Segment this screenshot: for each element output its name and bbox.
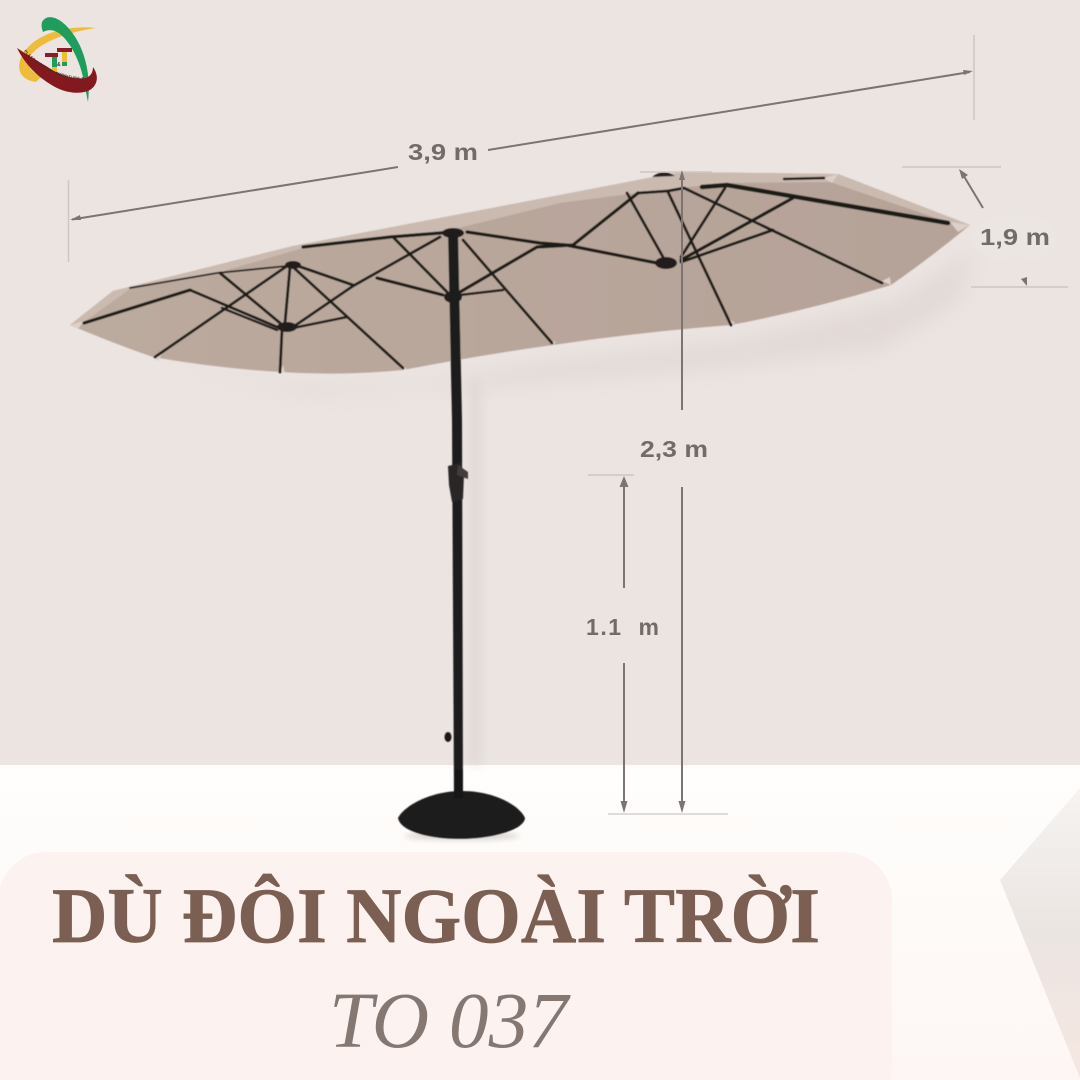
background wall <box>0 0 1080 766</box>
title panel <box>0 852 892 1080</box>
dimension: 1.1 m: 1.1 m <box>586 614 659 640</box>
rib tips <box>70 174 970 373</box>
green arc <box>42 17 89 102</box>
logo <box>17 17 97 102</box>
model code: TO 037 <box>329 978 572 1065</box>
pole <box>448 232 463 800</box>
pole shadow on wall <box>468 380 482 765</box>
logo curved text: PLASTIC RATTAN FURNITURE T <box>24 50 84 80</box>
title: DÙ ĐÔI NGOÀI TRỜI <box>52 872 820 959</box>
upper canopy fold <box>70 172 970 325</box>
dimension: 2,3 m <box>640 170 712 813</box>
hubs <box>277 228 677 332</box>
decorative chevron <box>1000 788 1080 1078</box>
baseline tick <box>608 813 728 815</box>
logo mark: & <box>57 62 61 68</box>
right ribs <box>627 178 948 325</box>
yellow arc <box>19 27 96 82</box>
dimension: 1.1 m <box>586 475 659 813</box>
umbrella shadow on wall <box>160 250 975 395</box>
dimension: 1,9 m: 1,9 m <box>980 224 1050 250</box>
maroon swoosh <box>17 48 97 93</box>
floor <box>0 765 1080 1080</box>
left ribs <box>84 237 440 372</box>
base shadow <box>404 832 520 840</box>
dimension: 1,9 m <box>902 167 1068 287</box>
tilt knob <box>444 732 452 742</box>
pole foot <box>454 770 463 798</box>
umbrella frame ribs <box>84 178 948 372</box>
dimension: 3,9 m <box>68 35 974 262</box>
crank <box>448 463 468 502</box>
middle ribs <box>303 193 657 343</box>
dimension: 3,9 m: 3,9 m <box>408 139 478 165</box>
umbrella canopy <box>70 172 970 374</box>
dimension: 2,3 m: 2,3 m <box>640 436 708 462</box>
base <box>398 791 525 839</box>
top cap of right hub <box>652 172 675 177</box>
umbrella <box>70 172 970 840</box>
label patch <box>973 214 1057 262</box>
